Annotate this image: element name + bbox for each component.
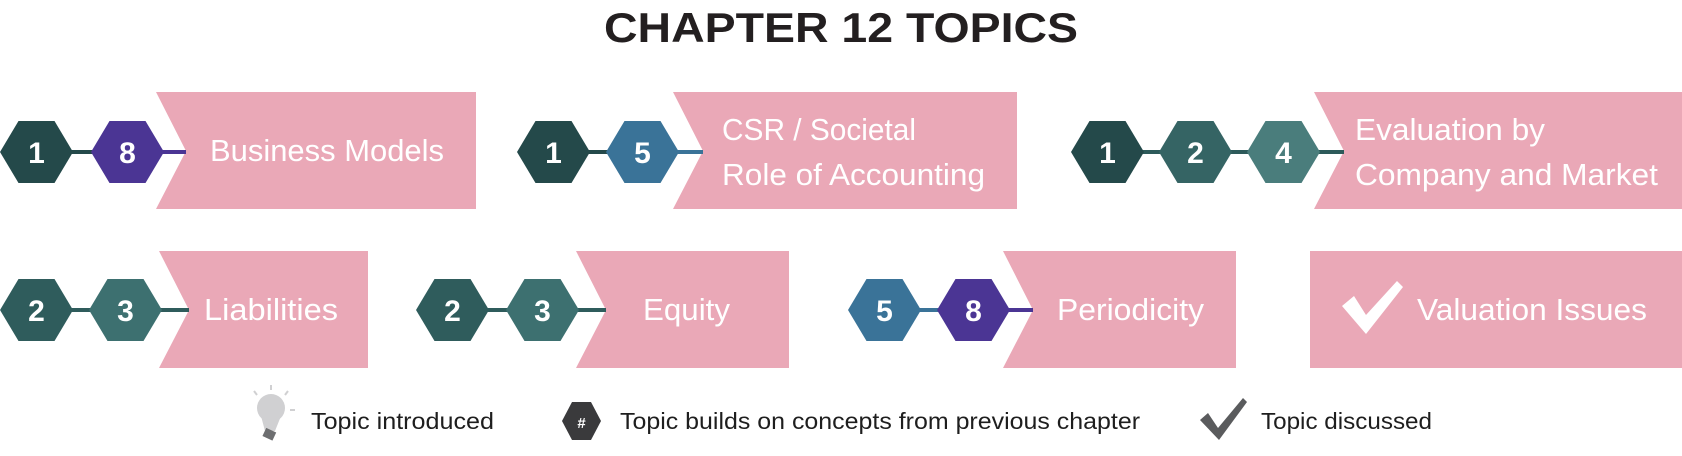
- panel: business models: [0, 92, 476, 209]
- panel: evaluation: [1071, 92, 1682, 209]
- panel: equity: 2: [444, 295, 461, 328]
- panel: liabilities: 2: [28, 295, 45, 328]
- panel: periodicity: 5: [876, 295, 893, 328]
- legend: Topic introduced: [311, 408, 494, 434]
- icon: hexagon #: #: [577, 415, 586, 432]
- panel: periodicity: [848, 251, 1236, 368]
- icon: lightbulb: [254, 385, 295, 441]
- panel: periodicity: 8: [965, 295, 982, 328]
- panel: equity: [416, 251, 789, 368]
- panel: evaluation: 1: [1099, 137, 1116, 170]
- panel: equity: 3: [534, 295, 551, 328]
- panel: equity: Equity: [643, 292, 730, 327]
- panel: evaluation: 2: [1187, 137, 1204, 170]
- panel: liabilities: [0, 251, 368, 368]
- panel: CSR: [517, 92, 1017, 209]
- panel: CSR: CSR / Societal: [722, 112, 916, 147]
- panel: CSR: Role of Accounting: [722, 157, 985, 192]
- panel: valuation issues: Valuation Issues: [1417, 292, 1647, 327]
- icon: hexagon #: [562, 402, 601, 440]
- icon: check: [1342, 281, 1403, 334]
- panel: evaluation: Evaluation by: [1355, 112, 1546, 147]
- panel: valuation issues: [1310, 251, 1682, 368]
- panel: CSR: 1: [545, 137, 562, 170]
- panel: evaluation: 4: [1275, 137, 1292, 170]
- icon: check: [1200, 398, 1247, 440]
- legend: Topic builds on concepts from previous chapter: [620, 408, 1140, 434]
- panel: liabilities: Liabilities: [204, 292, 338, 327]
- panel: business models: Business Models: [210, 133, 444, 168]
- panel: periodicity: Periodicity: [1057, 292, 1205, 327]
- legend: [254, 385, 1432, 441]
- panel: business models: 8: [119, 137, 136, 170]
- legend: Topic discussed: [1261, 408, 1432, 434]
- panel: CSR: 5: [634, 137, 651, 170]
- panel: evaluation: Company and Market: [1355, 157, 1658, 192]
- panel: liabilities: 3: [117, 295, 134, 328]
- panel: business models: 1: [28, 137, 45, 170]
- title: CHAPTER 12 TOPICS: [604, 4, 1078, 51]
